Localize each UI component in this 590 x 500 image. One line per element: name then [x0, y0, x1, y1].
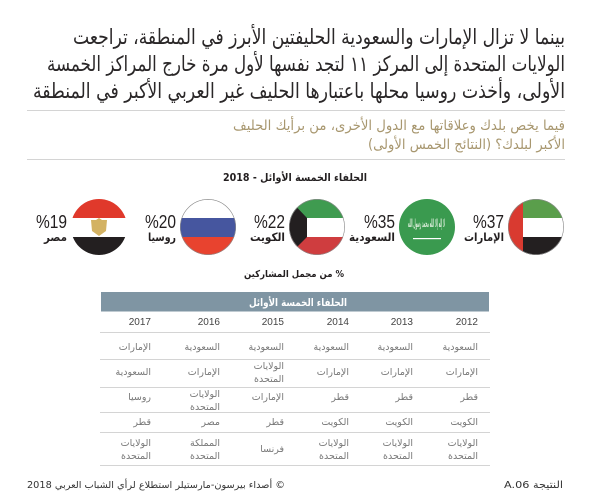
icon: UAE flag [508, 199, 564, 255]
rank 3 row: قطر [394, 392, 413, 403]
ally: Kuwait [250, 199, 345, 255]
rank 2 row: الإمارات [317, 367, 349, 378]
survey question: فيما يخص بلدك وعلاقاتها مع الدول الأخرى، من برأيك الحليف [233, 116, 565, 134]
rank 5 row: الولايات [448, 438, 478, 449]
rank 2 row: السعودية [116, 367, 151, 378]
year row: 2012 [456, 317, 478, 328]
rank 1 row: السعودية [185, 342, 220, 353]
survey question: الأكبر لبلدك؟ (النتائج الخمس الأولى) [368, 135, 565, 153]
rank 5 row: المتحدة [383, 451, 413, 462]
rank 3 row: المتحدة [190, 402, 220, 413]
ally: UAE: الإمارات [464, 230, 504, 244]
ally: Egypt: %19 [36, 212, 67, 232]
rank 3 row [128, 389, 478, 413]
rank 4 row: الكويت [321, 417, 349, 428]
ally: Russia [145, 199, 236, 255]
rank 5 row [121, 438, 478, 462]
rank 1 row [119, 342, 478, 353]
year row: 2014 [327, 317, 349, 328]
ally: Kuwait: الكويت [250, 230, 285, 245]
rank 1 row: السعودية [443, 342, 478, 353]
ally: Kuwait: %22 [254, 212, 285, 232]
rank 3 row: الولايات [190, 389, 220, 400]
year row: 2016 [198, 317, 220, 328]
rank 4 row [132, 417, 478, 428]
headline [33, 24, 565, 103]
chart title: الحلفاء الخمسة الأوائل - 2018 [223, 171, 367, 184]
year row: 2015 [262, 317, 284, 328]
rank 4 row: قطر [132, 417, 151, 428]
ally: Saudi Arabia: السعودية [349, 230, 395, 245]
ally: Egypt [36, 199, 127, 255]
rank 2 row: الإمارات [188, 367, 220, 378]
rank 5 row: المتحدة [319, 451, 349, 462]
chart note: % من مجمل المشاركين [244, 269, 344, 280]
rank 1 row: السعودية [314, 342, 349, 353]
table header [101, 292, 489, 312]
text: لا إله إلا الله محمد رسول الله [408, 217, 445, 230]
table header: الحلفاء الخمسة الأوائل [249, 296, 347, 309]
survey question [233, 116, 565, 153]
rank 1 row: السعودية [378, 342, 413, 353]
year row [129, 317, 478, 328]
ally: Russia: %20 [145, 212, 176, 232]
rank 2 row: الولايات [254, 361, 284, 372]
rank 2 row: المتحدة [254, 374, 284, 385]
year row: 2017 [129, 317, 151, 328]
ally: UAE [464, 199, 564, 255]
rank 5 row: المتحدة [121, 451, 151, 462]
ally: Russia: روسيا [148, 230, 176, 245]
rank 5 row: الولايات [121, 438, 151, 449]
rank 5 row: المتحدة [190, 451, 220, 462]
rank 4 row: الكويت [385, 417, 413, 428]
icon: Kuwait flag [289, 199, 345, 255]
rank 5 row: المتحدة [448, 451, 478, 462]
rank 3 row: قطر [330, 392, 349, 403]
table: top five allies by year [100, 292, 490, 466]
rank 1 row: الإمارات [119, 342, 151, 353]
rank 1 row: السعودية [249, 342, 284, 353]
rank 2 row [116, 361, 478, 385]
rank 4 row: الكويت [450, 417, 478, 428]
rank 4 row: قطر [265, 417, 284, 428]
ally: Saudi Arabia [349, 199, 455, 255]
ally: Saudi Arabia: %35 [364, 212, 395, 232]
rank 5 row: الولايات [383, 438, 413, 449]
rank 5 row: فرنسا [260, 444, 284, 455]
ally: UAE: %37 [473, 212, 504, 232]
icon: Egypt flag [71, 199, 127, 255]
rank 2 row: الإمارات [381, 367, 413, 378]
rank 3 row: قطر [459, 392, 478, 403]
year row: 2013 [391, 317, 413, 328]
rank 3 row: الإمارات [252, 392, 284, 403]
rank 4 row: مصر [200, 417, 220, 428]
footer: source: © أصداء بيرسون-مارستيلر استطلاع لرأي الشباب العربي 2018 [27, 478, 285, 491]
rank 3 row: روسيا [128, 392, 151, 403]
ally: Egypt: مصر [43, 230, 67, 244]
rank 5 row: المملكة [190, 438, 220, 449]
icon: Russia flag [180, 199, 236, 255]
rank 2 row: الإمارات [446, 367, 478, 378]
rank 5 row: الولايات [319, 438, 349, 449]
footer: result number: النتيجة A.06 [504, 480, 563, 491]
